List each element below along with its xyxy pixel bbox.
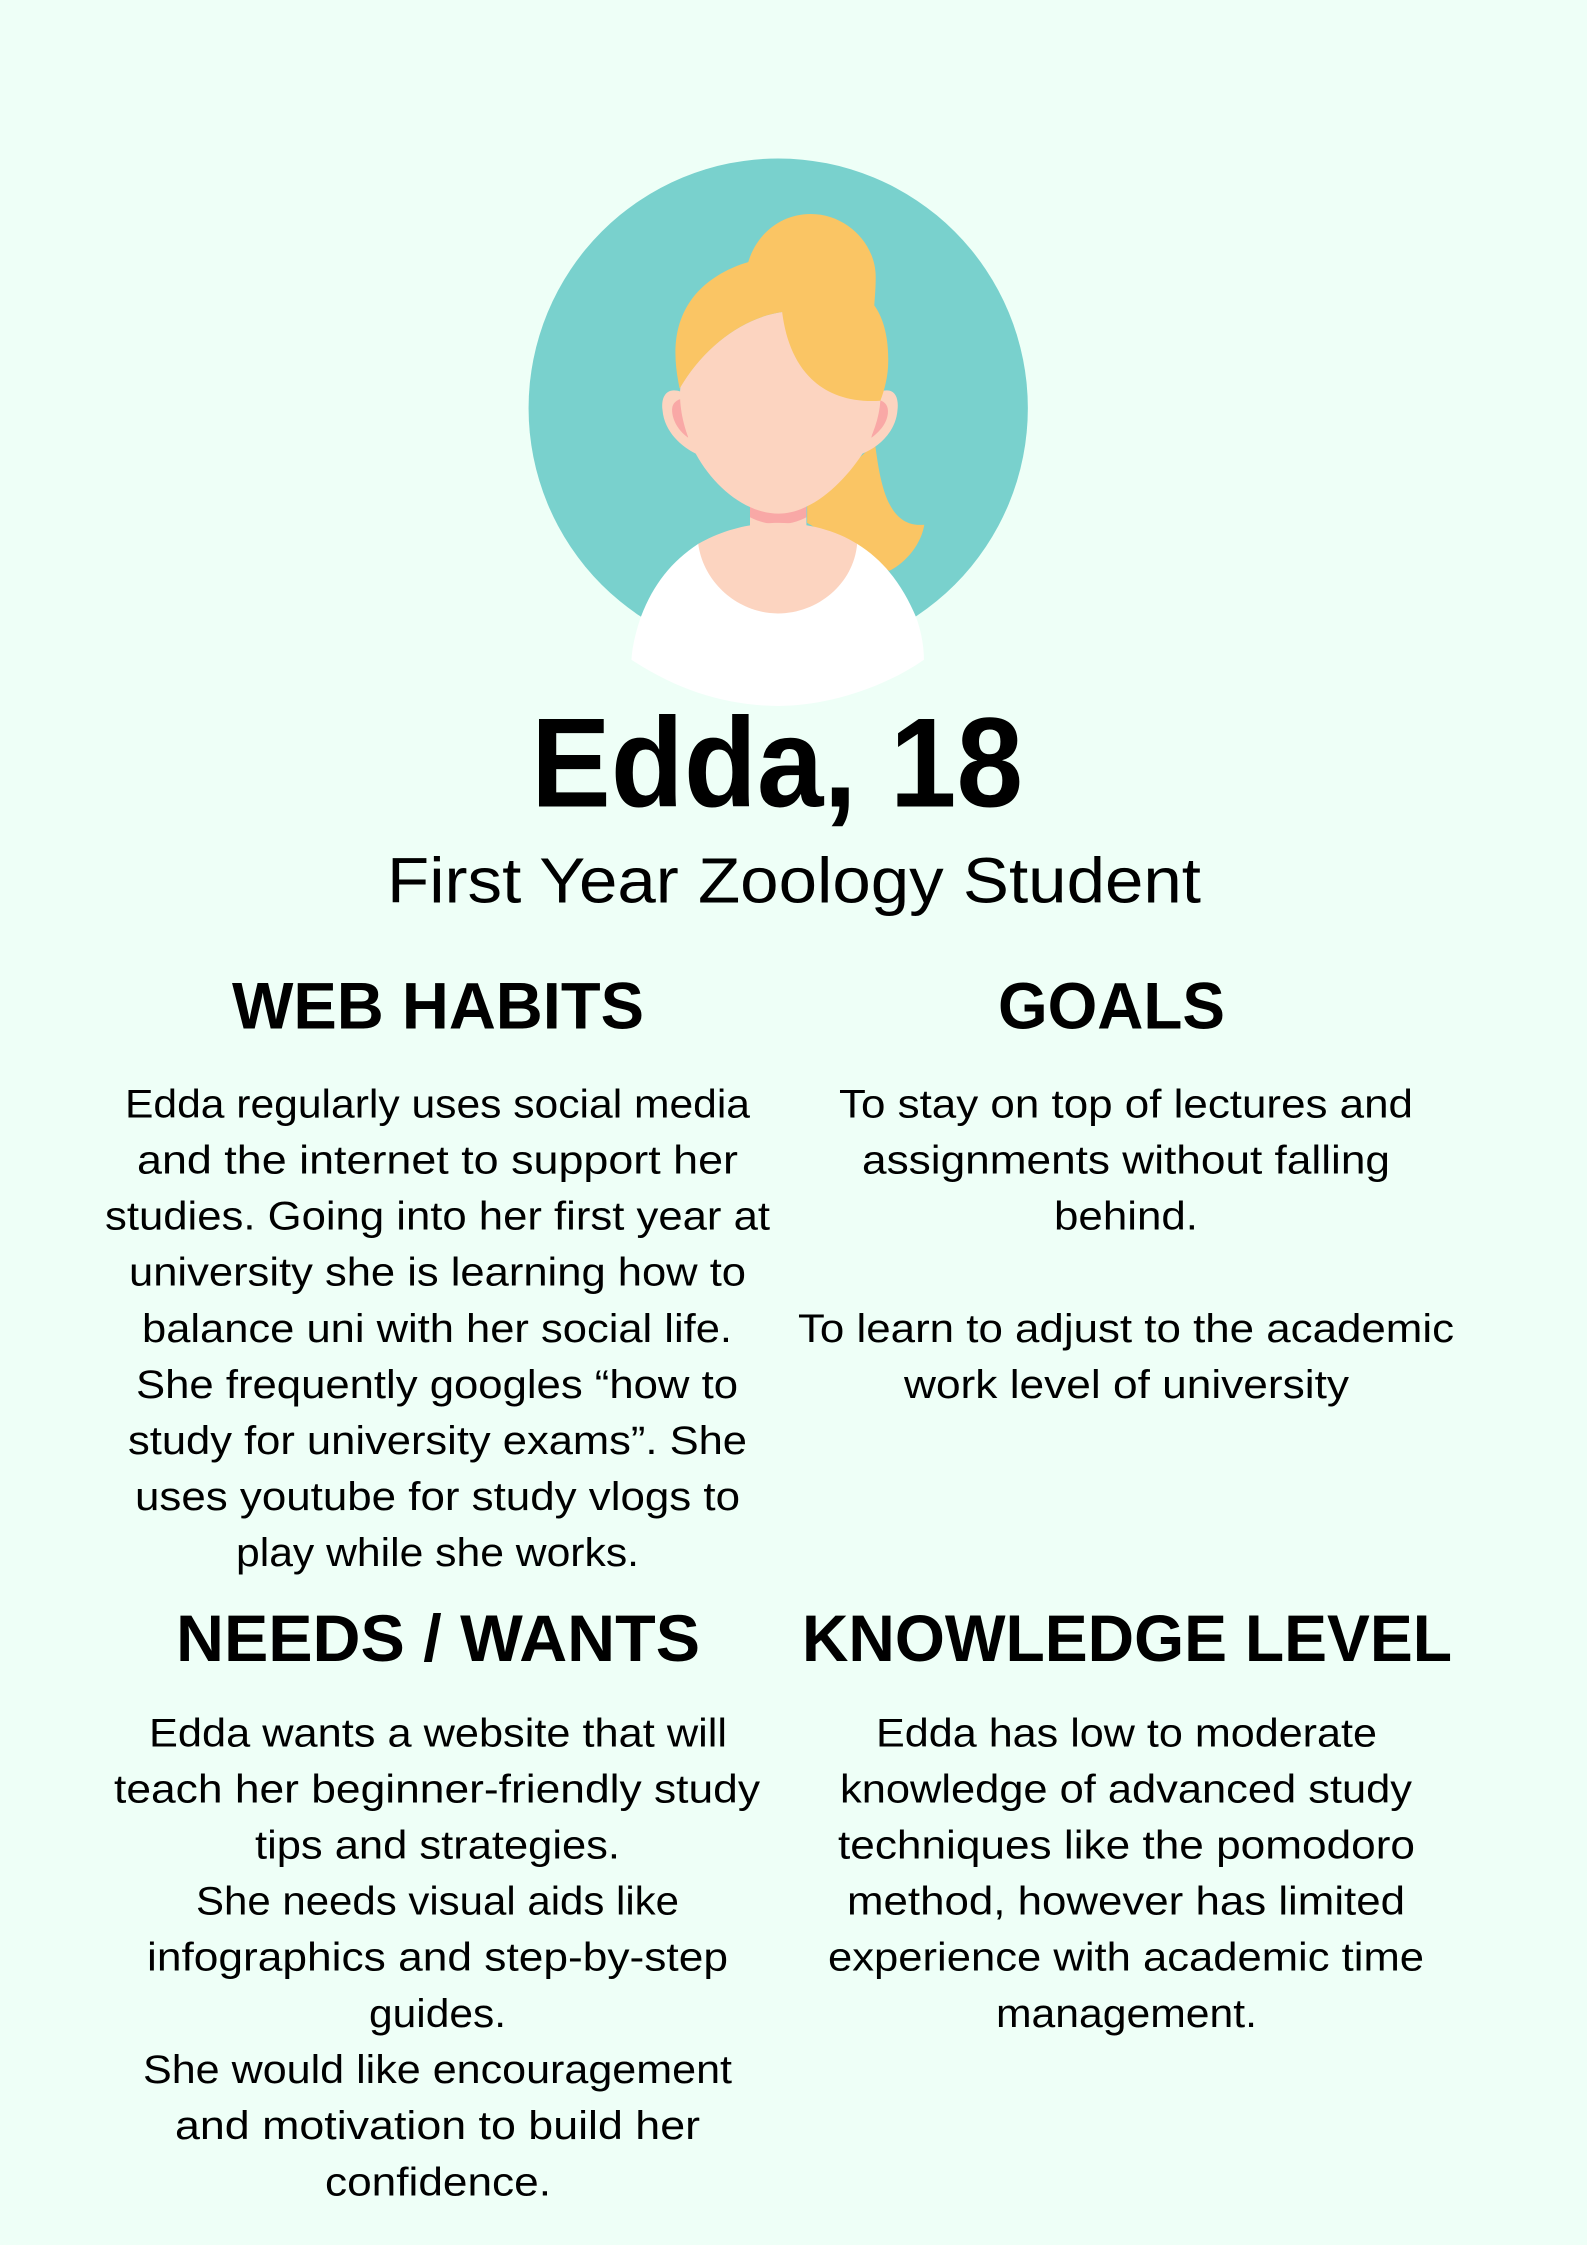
ponytail xyxy=(807,443,924,571)
left inner ear xyxy=(672,399,688,438)
text block: needs and wants: Edda wants a website that will xyxy=(149,1711,727,1755)
text block: knowledge level: techniques like the pomodoro xyxy=(838,1824,1415,1868)
text block: web habits: studies. Going into her first year at xyxy=(105,1195,770,1239)
neck xyxy=(750,495,806,528)
text block: needs and wants: She needs visual aids like xyxy=(196,1880,679,1924)
text block: needs and wants: guides. xyxy=(369,1992,506,2036)
text block: goals xyxy=(798,1082,1454,1407)
text block: web habits: uses youtube for study vlogs to xyxy=(135,1475,740,1519)
avatar background circle xyxy=(529,158,1028,658)
text block: goals: work level of university xyxy=(903,1363,1349,1407)
panel: knowledge level xyxy=(802,1601,1452,2036)
text block: goals: assignments without falling xyxy=(862,1138,1390,1182)
hair and bun xyxy=(675,214,888,401)
heading: goals: GOALS xyxy=(998,968,1225,1042)
text block: knowledge level: experience with academic time xyxy=(828,1936,1424,1980)
neck shadow xyxy=(750,503,806,524)
text block: web habits: Edda regularly uses social media xyxy=(125,1082,751,1126)
white shirt xyxy=(631,544,924,706)
text block: knowledge level: method, however has limited xyxy=(847,1880,1405,1924)
right inner ear xyxy=(871,400,888,438)
text block: web habits: She frequently googles “how to xyxy=(136,1363,738,1407)
text block: web habits: study for university exams”. She xyxy=(128,1419,747,1463)
heading: needs and wants: NEEDS / WANTS xyxy=(176,1601,700,1675)
panel: needs and wants xyxy=(114,1601,760,2204)
face xyxy=(680,312,880,514)
text block: goals: To learn to adjust to the academic xyxy=(798,1307,1454,1351)
text block: knowledge level xyxy=(828,1711,1424,2036)
text block: needs and wants: infographics and step-by-step xyxy=(147,1936,728,1980)
text block: needs and wants: and motivation to build her xyxy=(175,2104,700,2148)
heading: web habits: WEB HABITS xyxy=(232,968,644,1042)
text block: knowledge level: Edda has low to moderate xyxy=(876,1711,1377,1755)
text block: web habits: balance uni with her social life. xyxy=(142,1307,732,1351)
text block: needs and wants xyxy=(114,1711,760,2204)
left ear xyxy=(662,390,714,454)
text block: knowledge level: management. xyxy=(996,1992,1257,2036)
text block: goals: behind. xyxy=(1054,1195,1198,1239)
text block: web habits: play while she works. xyxy=(236,1531,639,1575)
text block: needs and wants: confidence. xyxy=(325,2160,551,2204)
text block: needs and wants: She would like encouragement xyxy=(143,2048,732,2092)
chest xyxy=(698,523,857,613)
text block: knowledge level: knowledge of advanced study xyxy=(840,1767,1412,1811)
panel: web habits xyxy=(105,968,770,1575)
right ear xyxy=(843,390,898,454)
subtitle: First Year Zoology Student xyxy=(387,845,1201,917)
text block: needs and wants: tips and strategies. xyxy=(255,1824,620,1868)
text block: needs and wants: teach her beginner-friendly study xyxy=(114,1767,760,1811)
text block: web habits xyxy=(105,1082,770,1575)
title: Edda, 18 xyxy=(531,692,1023,834)
panel: goals xyxy=(798,968,1454,1407)
avatar illustration xyxy=(529,158,1028,706)
text block: goals: To stay on top of lectures and xyxy=(839,1082,1413,1126)
heading: knowledge level: KNOWLEDGE LEVEL xyxy=(802,1601,1452,1675)
text block: web habits: and the internet to support her xyxy=(137,1138,738,1182)
text block: web habits: university she is learning how to xyxy=(129,1251,746,1295)
